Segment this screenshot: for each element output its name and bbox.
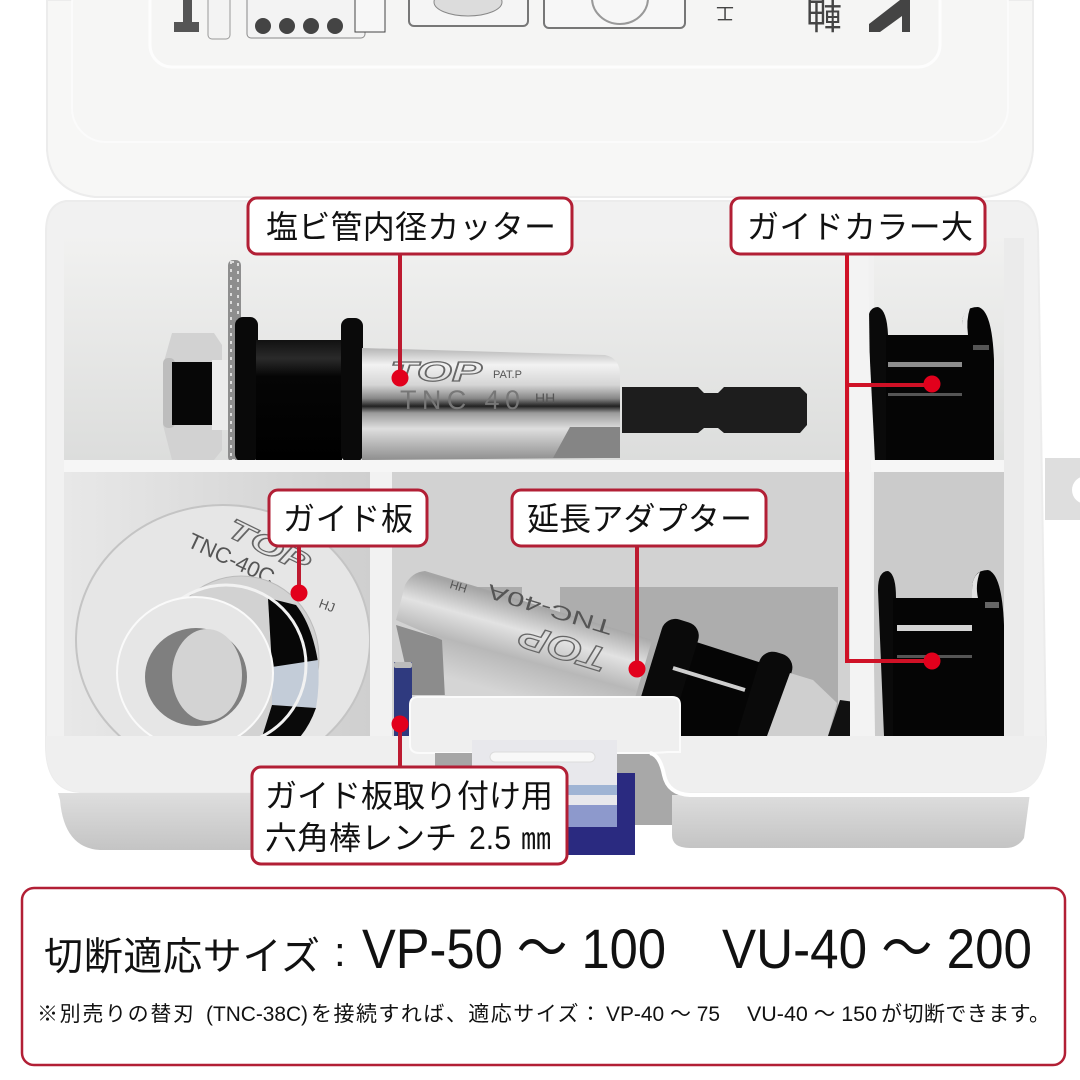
callout: pipe cutter: [248, 198, 572, 386]
heading: cutting sizes: VU-40 ～ 200: [722, 917, 1032, 980]
extension adapter: TOP: [515, 616, 612, 679]
front clasp: [410, 697, 1030, 827]
heading: cutting sizes: 切断適応サイズ: [44, 936, 320, 979]
heading: cutting sizes: VP-50 ～ 100: [362, 917, 666, 980]
cutter markings: PAT.P: [493, 369, 522, 381]
cutter tool: [163, 260, 807, 462]
guide collar large top: [868, 307, 994, 460]
callout: hex wrench: 六角棒レンチ: [265, 820, 457, 856]
plastic case lid: [47, 0, 1033, 197]
cutter markings: TOP: [390, 356, 483, 387]
extension adapter: HH: [448, 577, 469, 596]
callout: hex wrench: ガイド板取り付け用: [265, 778, 553, 814]
callout: hex wrench: [252, 716, 567, 864]
callout: hex wrench: ㎜: [521, 823, 551, 856]
callout: guide plate: ガイド板: [283, 501, 413, 537]
guide plate: [75, 504, 370, 736]
guide plate: HJ: [317, 596, 337, 615]
heading: cutting sizes: [44, 917, 1032, 980]
footnote: VU-40 ～ 150: [747, 1003, 877, 1026]
case rim and dividers: [46, 238, 1046, 850]
guide plate: TNC-40C: [184, 528, 279, 590]
cutter markings: HH: [535, 390, 555, 406]
callout: extension adapter: [512, 490, 766, 678]
callout: large guide collar: [731, 198, 985, 670]
callout: extension adapter: 延長アダプター: [527, 501, 752, 537]
footnote: (TNC-38C): [206, 1003, 308, 1026]
blue clasp base: [567, 773, 635, 855]
plastic case body: [46, 201, 1080, 792]
callout: guide plate: [269, 490, 427, 602]
printed marks on the lid: 工: [716, 3, 734, 23]
guide collar large bottom: [878, 570, 1004, 736]
guide plate: TOP: [222, 513, 315, 579]
footnote: VP-40 ～ 75: [606, 1003, 720, 1026]
heading: cutting sizes: :: [334, 928, 346, 975]
footnote: が切断できます。: [881, 1003, 1050, 1026]
footnote: [37, 1003, 1050, 1026]
printed marks on the lid: [174, 0, 910, 39]
callout: hex wrench: 2.5: [469, 820, 511, 856]
callout: pipe cutter: 塩ビ管内径カッター: [266, 209, 556, 245]
callout: large guide collar: ガイドカラー大: [747, 209, 973, 245]
footnote: を接続すれば、適応サイズ：: [311, 1003, 601, 1026]
footnote: ※別売りの替刃: [37, 1003, 194, 1026]
panel: applicable cutting sizes: [22, 888, 1065, 1065]
cutter markings: [390, 356, 555, 415]
cutter markings: TNC 40: [400, 385, 520, 415]
extension adapter: [396, 571, 862, 754]
extension adapter: TNC-40A: [484, 579, 615, 638]
hex wrench: [394, 662, 412, 737]
